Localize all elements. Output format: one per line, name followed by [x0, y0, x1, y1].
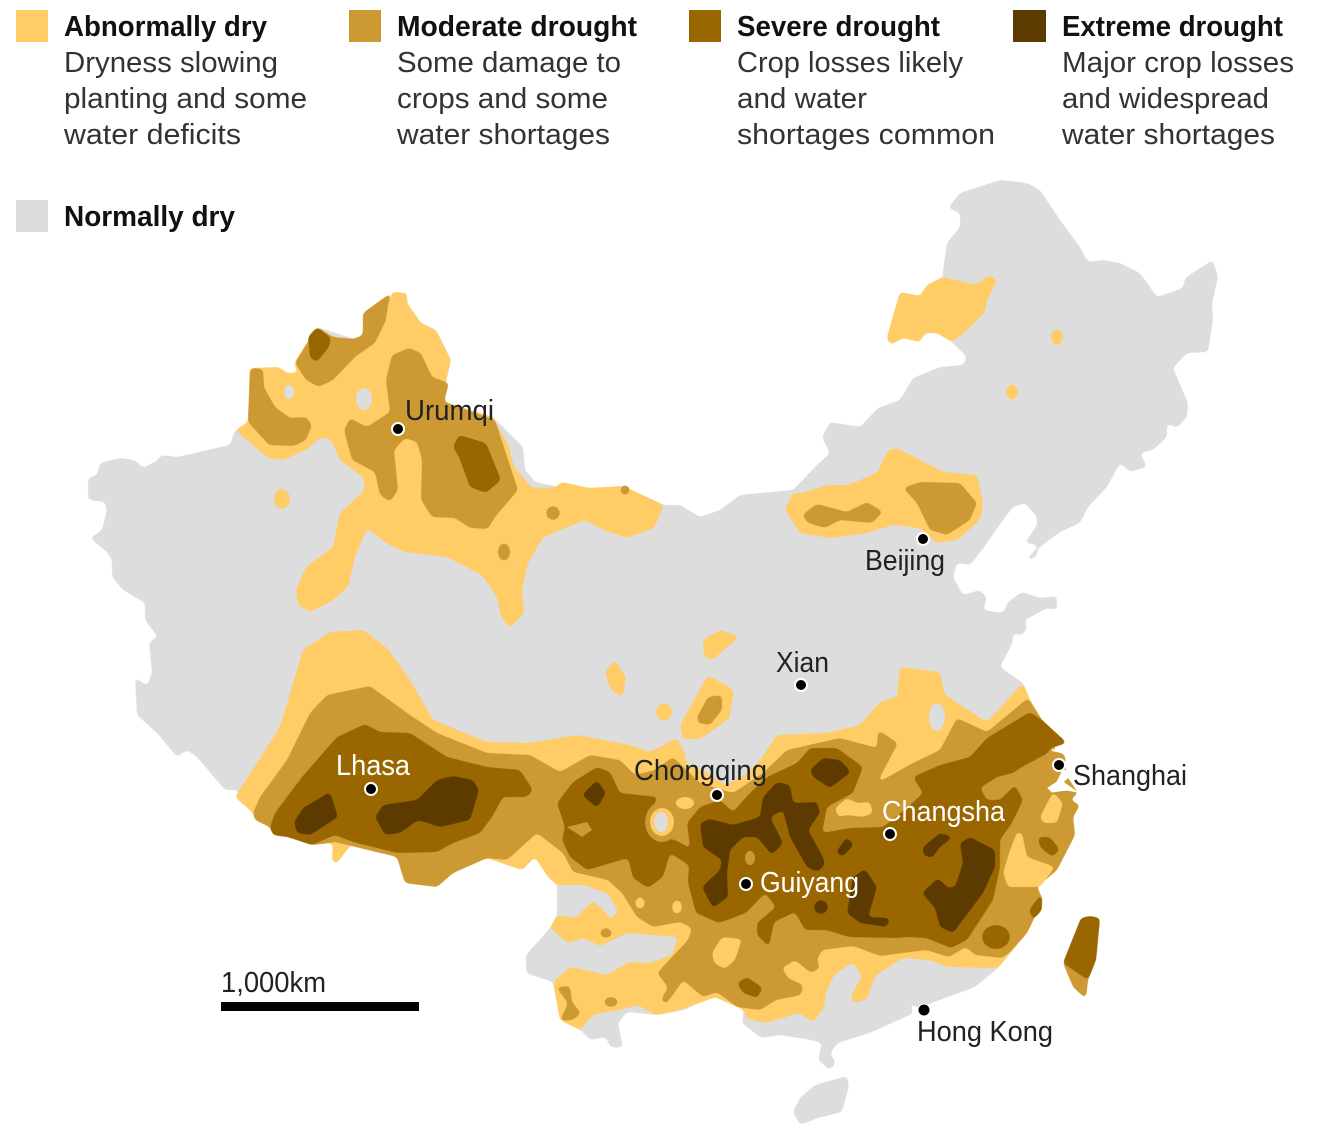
city marker: Changsha [882, 796, 1006, 840]
abnormally dry pockets inside moderate areas [635, 792, 1063, 969]
legend item: normally dry: Normally dry [64, 201, 235, 233]
legend item: severe drought: and water [737, 83, 867, 115]
city marker: Changsha: Changsha [882, 796, 1006, 828]
legend [16, 10, 1294, 233]
city marker: Hong Kong: Hong Kong [917, 1016, 1053, 1048]
legend item: extreme drought: Major crop losses [1062, 47, 1294, 79]
legend item: extreme drought [1013, 10, 1294, 151]
scale bar [221, 967, 419, 1011]
Taiwan [1063, 916, 1100, 999]
map of China [88, 180, 1218, 1125]
extreme drought areas [294, 758, 995, 933]
city marker: Hong Kong [917, 1004, 1053, 1048]
legend item: moderate drought: Moderate drought [397, 11, 637, 43]
legend item: severe drought: Severe drought [737, 11, 940, 43]
legend item: abnormally dry: Dryness slowing [64, 47, 278, 79]
legend item: severe drought: Crop losses likely [737, 47, 963, 79]
legend item: abnormally dry [16, 10, 307, 151]
legend item: severe drought [689, 10, 995, 151]
legend item: moderate drought: Some damage to [397, 47, 621, 79]
scale bar: 1,000km [221, 967, 326, 999]
city marker: Beijing [865, 533, 945, 577]
legend item: extreme drought: water shortages [1061, 119, 1275, 151]
city marker: Xian [776, 647, 829, 691]
city marker: Xian: Xian [776, 647, 829, 679]
Shanghai coast inlet [1048, 750, 1077, 792]
city marker: Lhasa [336, 750, 411, 795]
city marker: Lhasa: Lhasa [336, 750, 411, 782]
normally dry holes inside drought areas [284, 385, 945, 731]
city marker: Chongqing [634, 755, 767, 801]
moderate drought areas [248, 292, 1100, 1021]
city marker: Shanghai: Shanghai [1073, 760, 1187, 792]
severe drought areas [270, 327, 1100, 998]
city marker: Beijing: Beijing [865, 545, 945, 577]
legend item: severe drought: shortages common [737, 119, 995, 151]
legend item: moderate drought: crops and some [397, 83, 608, 115]
base layer: normally dry land [88, 180, 1218, 1125]
legend item: abnormally dry: planting and some [64, 83, 307, 115]
city marker: Guiyang: Guiyang [760, 867, 859, 899]
city marker: Urumqi: Urumqi [405, 395, 494, 427]
city marker: Chongqing: Chongqing [634, 755, 767, 787]
city marker: Urumqi [392, 395, 494, 435]
legend item: extreme drought: and widespread [1062, 83, 1269, 115]
Hainan island [793, 1076, 849, 1125]
legend item: moderate drought [349, 10, 637, 151]
abnormally dry areas [235, 275, 1080, 1030]
legend item: abnormally dry: Abnormally dry [64, 11, 267, 43]
legend item: abnormally dry: water deficits [63, 119, 241, 151]
legend item: extreme drought: Extreme drought [1062, 11, 1283, 43]
legend item: moderate drought: water shortages [396, 119, 610, 151]
moderate and dry pockets inside severe areas [567, 797, 755, 865]
